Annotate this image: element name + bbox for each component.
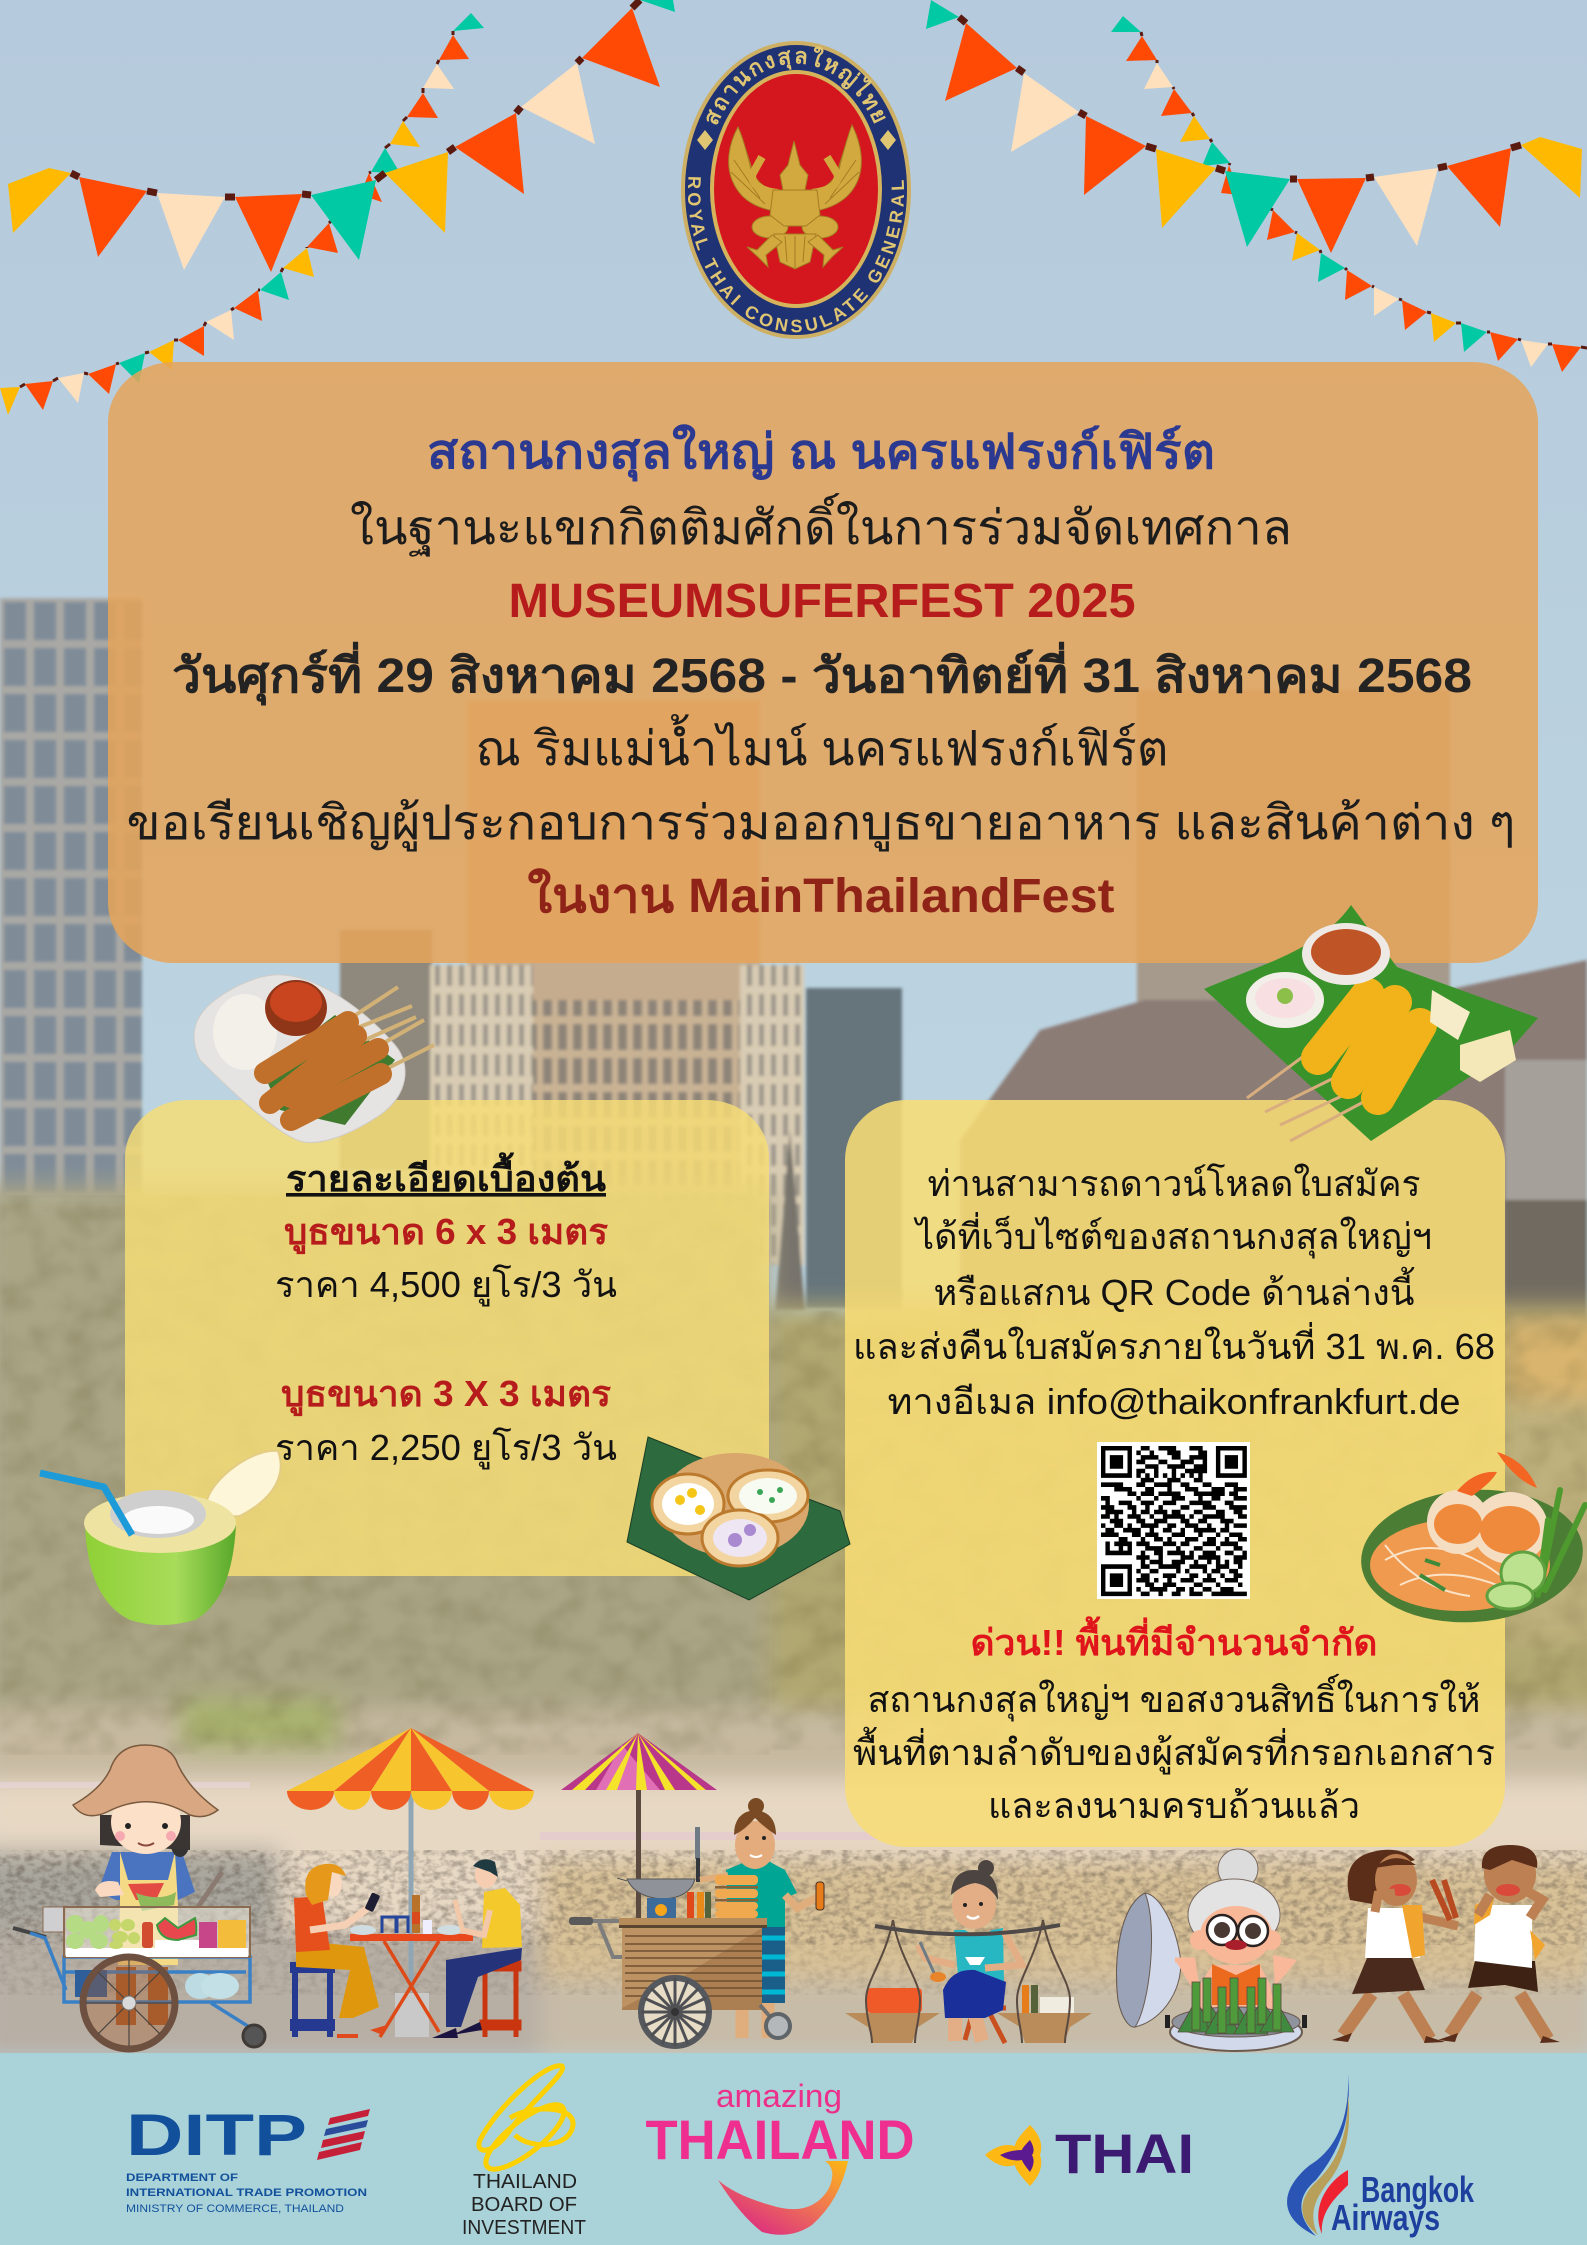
QR code bbox=[1097, 1442, 1250, 1599]
panel: application bbox=[845, 1100, 1505, 1847]
logo: DITP: DEPARTMENT OF bbox=[126, 2172, 238, 2184]
cart bbox=[13, 1872, 265, 2049]
illustration: coconut drink bbox=[40, 1451, 281, 1625]
panel: invitation bbox=[108, 362, 1538, 963]
heading: details: รายละเอียดเบื้องต้น bbox=[286, 1152, 606, 1199]
text: application instructions: หรือแสกน QR Code ด้านล่างนี้ bbox=[934, 1266, 1415, 1313]
text: conditions: สถานกงสุลใหญ่ฯ ขอสงวนสิทธิ์ในการให้ bbox=[868, 1673, 1480, 1722]
text: booth 3x3: บูธขนาด 3 X 3 เมตร bbox=[281, 1373, 612, 1417]
text: application instructions: ได้ที่เว็บไซต์ของสถานกงสุลใหญ่ฯ bbox=[913, 1212, 1432, 1259]
text: venue: ณ ริมแม่น้ำไมน์ นครแฟรงก์เฟิร์ต bbox=[476, 714, 1168, 776]
seller bbox=[918, 1860, 1022, 2018]
text: application instructions: ท่านสามารถดาวน์โหลดใบสมัคร bbox=[928, 1163, 1420, 1204]
heading: consulate: สถานกงสุลใหญ่ ณ นครแฟรงก์เฟิร์ต bbox=[427, 423, 1215, 482]
left basket bbox=[845, 1920, 940, 2043]
heading: festival name: MUSEUMSUFERFEST 2025 bbox=[508, 575, 1136, 628]
illustration: two children eating bbox=[1332, 1845, 1560, 2043]
logo: Bangkok Airways bbox=[1287, 2074, 1475, 2238]
icon: garuda bbox=[729, 125, 861, 269]
illustration: chicken satay on banana leaf bbox=[1204, 905, 1538, 1141]
tray bbox=[1165, 2007, 1307, 2051]
vendor woman bbox=[73, 1745, 218, 1965]
text: conditions: และลงนามครบถ้วนแล้ว bbox=[988, 1785, 1360, 1826]
text: price 2250: ราคา 2,250 ยูโร/3 วัน bbox=[275, 1427, 617, 1470]
table bbox=[350, 1895, 473, 2037]
logo: Thailand Board of Investment: THAILAND bbox=[473, 2171, 577, 2193]
logo: DITP: INTERNATIONAL TRADE PROMOTION bbox=[126, 2187, 367, 2199]
illustration: street food cart bbox=[561, 1733, 824, 2046]
text: application instructions: และส่งคืนใบสมัครภายในวันที่ 31 พ.ค. 68 bbox=[853, 1322, 1495, 1367]
panel: booth details bbox=[125, 1100, 769, 1576]
stove and wok bbox=[617, 1878, 711, 1918]
heading: hurry: ด่วน!! พื้นที่มีจำนวนจำกัด bbox=[970, 1616, 1378, 1663]
illustration: grandmother with leaf packets bbox=[1116, 1849, 1307, 2051]
bunting: right big string bbox=[926, 0, 1582, 253]
purple umbrella bbox=[561, 1733, 717, 1918]
logo: Bangkok Airways: Airways bbox=[1331, 2197, 1440, 2238]
bunting: left big string bbox=[8, 0, 675, 272]
dish cover bbox=[1116, 1893, 1181, 2027]
heading: event name: ในงาน MainThailandFest bbox=[528, 867, 1115, 923]
logo: DITP: MINISTRY OF COMMERCE, THAILAND bbox=[126, 2203, 344, 2215]
egg stacks bbox=[715, 1875, 758, 1918]
text: role: ในฐานะแขกกิตติมศักดิ์ในการร่วมจัดเทศกาล bbox=[350, 493, 1292, 556]
girl bbox=[1332, 1850, 1458, 2043]
emblem: Royal Thai Consulate General seal: สถานกงสุลใหญ่ไทย bbox=[706, 46, 886, 124]
illustration: papaya salad with shrimp bbox=[1357, 1452, 1587, 1630]
text: conditions bbox=[853, 1673, 1495, 1826]
logo: Bangkok Airways: Bangkok bbox=[1361, 2169, 1475, 2210]
logo: Thai Airways: THAI bbox=[1055, 2122, 1194, 2185]
bunting: right small string bbox=[1111, 16, 1587, 372]
man diner bbox=[432, 1859, 522, 2038]
text: booth 6x3: บูธขนาด 6 x 3 เมตร bbox=[284, 1211, 609, 1255]
emblem: Royal Thai Consulate General seal: ROYAL THAI CONSULATE GENERAL bbox=[688, 177, 904, 332]
cart body bbox=[569, 1917, 790, 2046]
logo: Amazing Thailand bbox=[646, 2078, 914, 2235]
logo: Amazing Thailand: amazing bbox=[716, 2078, 842, 2114]
text: application instructions bbox=[853, 1163, 1495, 1422]
cook bbox=[695, 1798, 824, 2038]
logo: Thailand Board of Investment: INVESTMENT bbox=[462, 2217, 586, 2239]
logo: Thailand Board of Investment: BOARD OF bbox=[471, 2194, 577, 2216]
logo: DITP: DITP bbox=[126, 2103, 307, 2168]
illustration: fruit vendor with cart bbox=[13, 1745, 265, 2049]
text: invitation: ขอเรียนเชิญผู้ประกอบการร่วมออกบูธขายอาหาร และสินค้าต่าง ๆ bbox=[126, 797, 1516, 852]
illustration: woman with shoulder baskets bbox=[845, 1860, 1092, 2043]
stool and feet bbox=[965, 2008, 1006, 2043]
woman diner bbox=[293, 1864, 390, 2038]
illustration: pork satay plate bbox=[194, 975, 434, 1142]
right basket bbox=[997, 1920, 1092, 2043]
bottom band bbox=[0, 2053, 1587, 2245]
text: application instructions: ทางอีเมล info@thaikonfrankfurt.de bbox=[888, 1381, 1460, 1422]
panel background bbox=[845, 1100, 1505, 1847]
bunting: left small string bbox=[0, 13, 484, 415]
text: dates: วันศุกร์ที่ 29 สิงหาคม 2568 - วันอาทิตย์ที่ 31 สิงหาคม 2568 bbox=[172, 641, 1472, 706]
panel background bbox=[108, 362, 1538, 963]
logo: Thai Airways bbox=[985, 2122, 1194, 2186]
logo: Amazing Thailand: THAILAND bbox=[646, 2108, 914, 2171]
emblem: Royal Thai Consulate General seal bbox=[681, 41, 911, 339]
umbrella bbox=[287, 1728, 534, 2037]
vendor legs bbox=[116, 1967, 168, 2025]
boy bbox=[1438, 1845, 1560, 2043]
logo: Thailand Board of Investment bbox=[462, 2066, 586, 2239]
text: conditions: พื้นที่ตามลำดับของผู้สมัครที่กรอกเอกสาร bbox=[853, 1726, 1495, 1775]
grandmother bbox=[1175, 1849, 1297, 2010]
illustration: umbrella and diners bbox=[287, 1728, 534, 2038]
text: price 4500: ราคา 4,500 ยูโร/3 วัน bbox=[275, 1264, 617, 1307]
panel background bbox=[125, 1100, 769, 1576]
illustration: steamed snack in leaf tray bbox=[627, 1437, 850, 1600]
leaf packets bbox=[1178, 1978, 1294, 2034]
carrying pole bbox=[875, 1925, 1060, 1934]
logo: DITP bbox=[126, 2103, 370, 2215]
icon: DITP flag stripes bbox=[317, 2109, 370, 2160]
